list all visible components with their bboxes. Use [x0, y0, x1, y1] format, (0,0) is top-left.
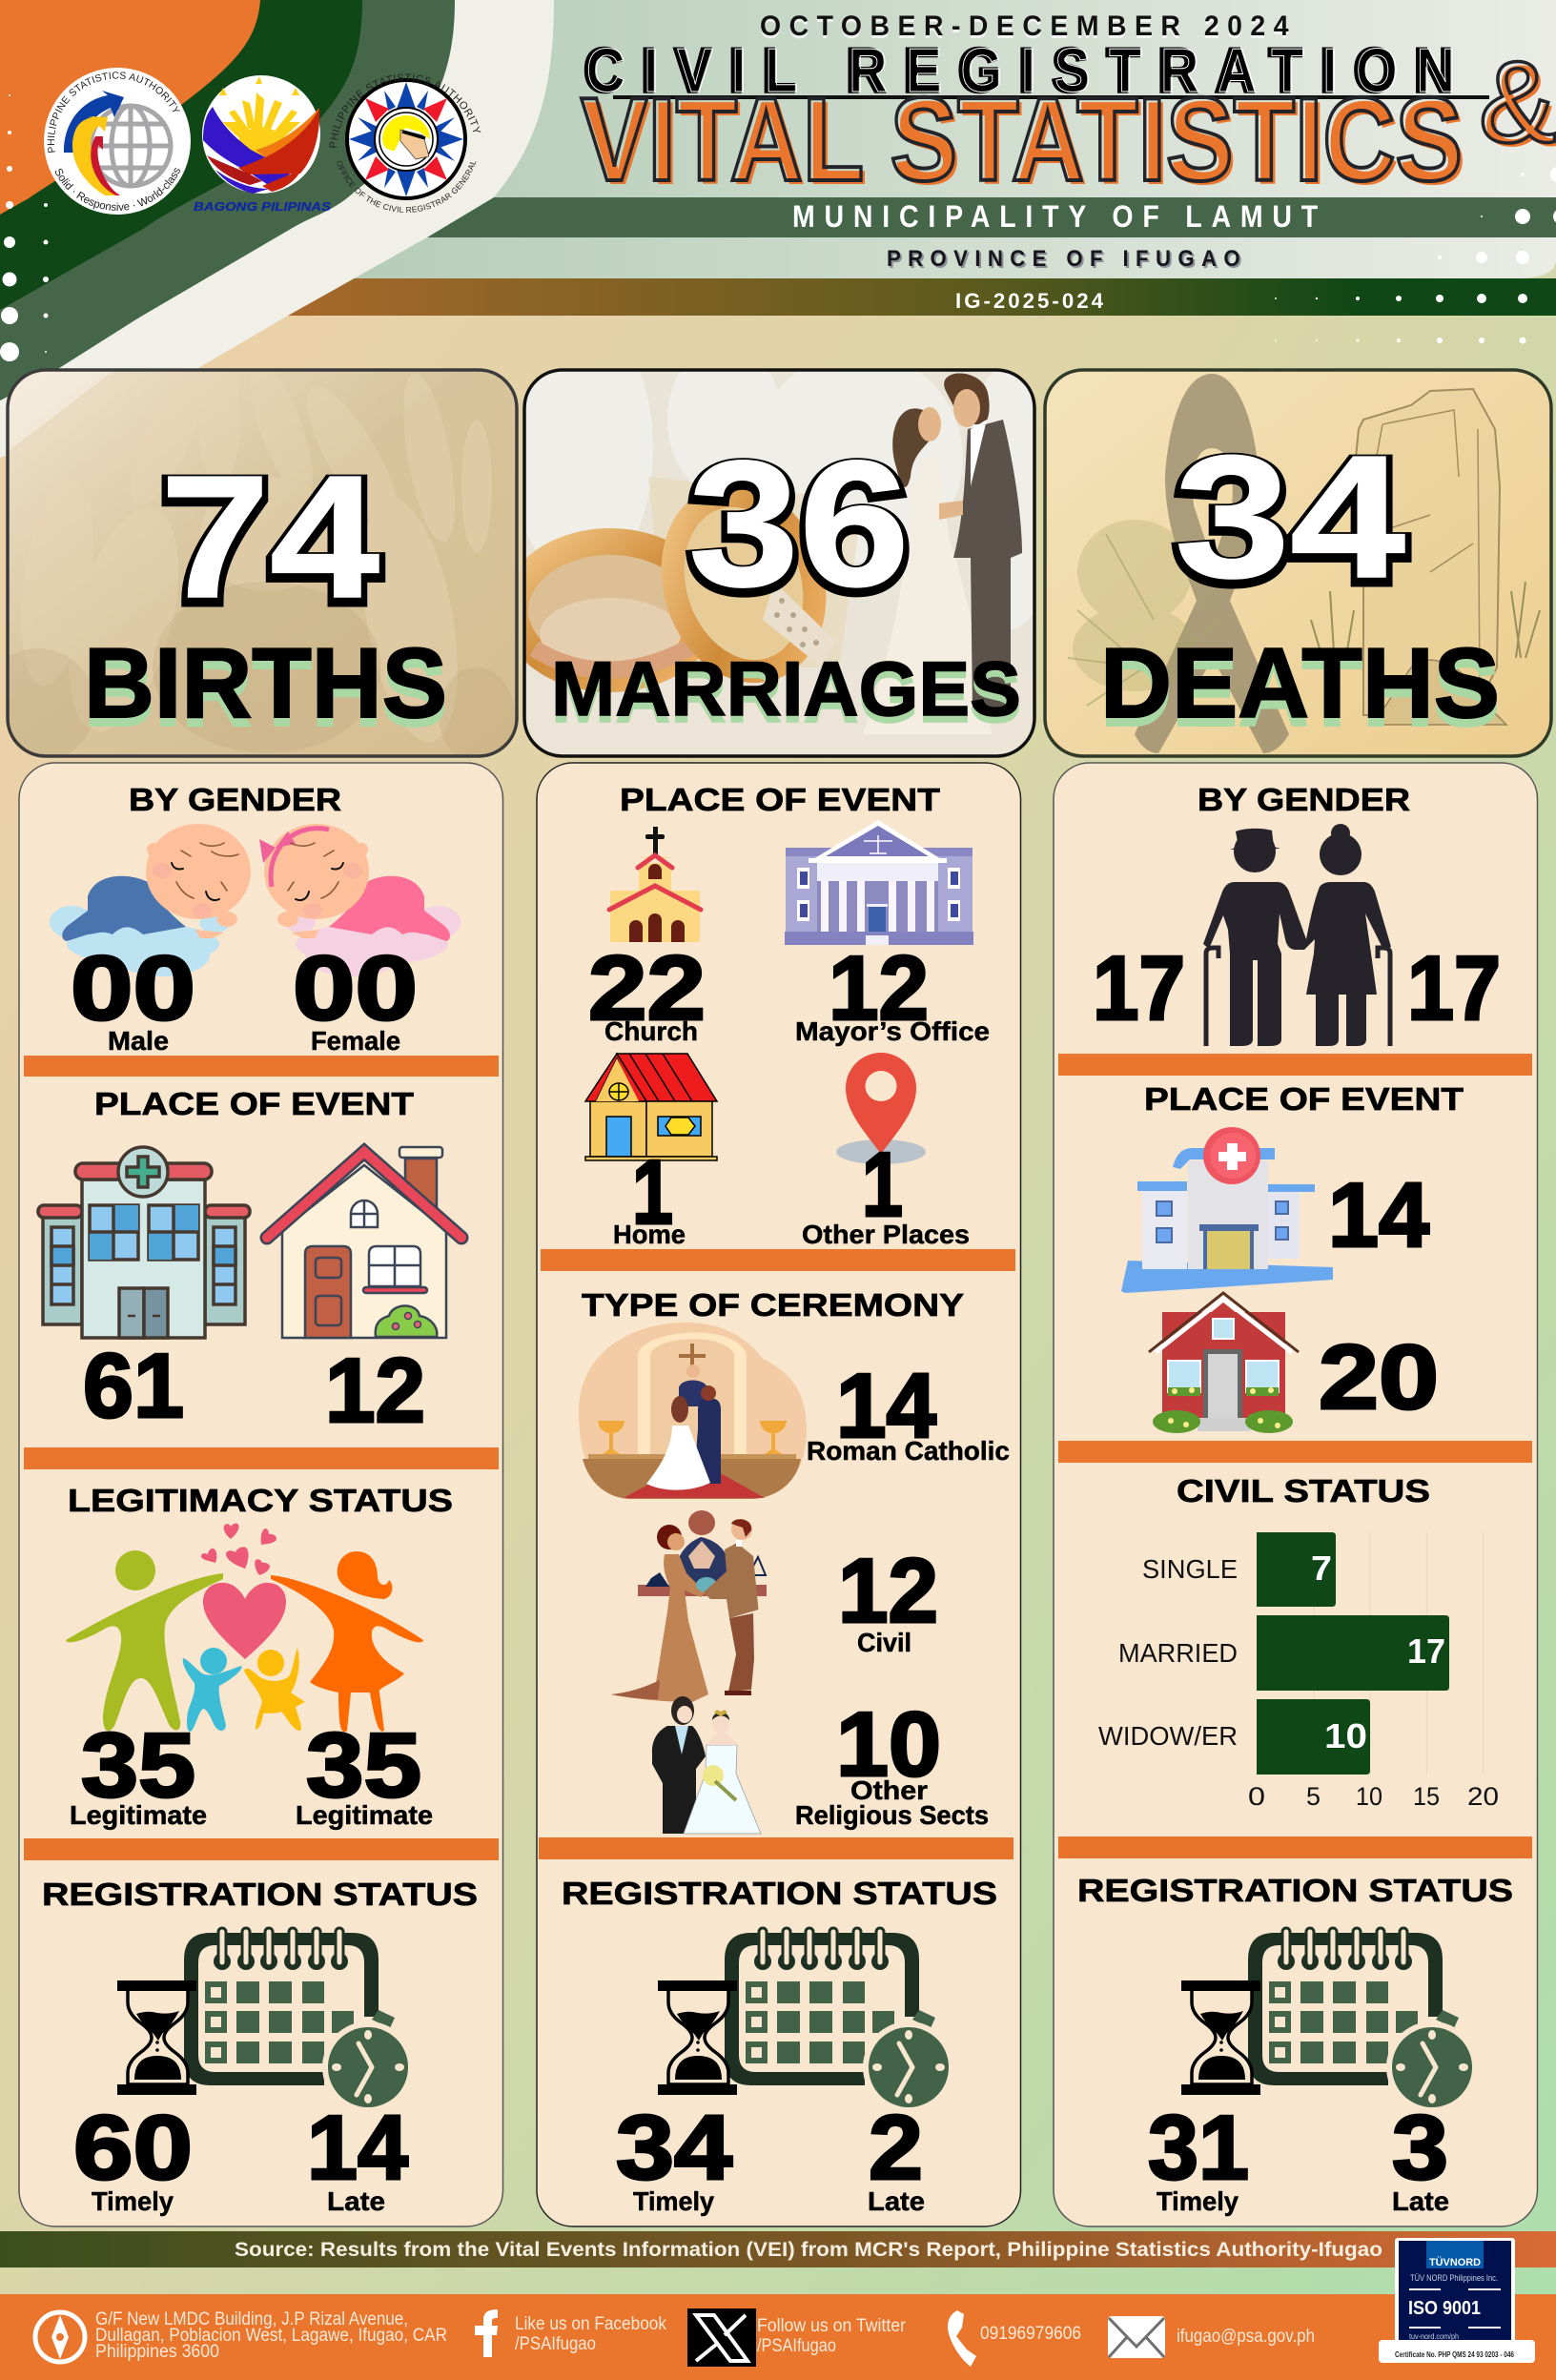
icon: mayor's office [785, 820, 973, 945]
header [0, 0, 1556, 458]
icon: home [585, 1054, 717, 1160]
marriages number: 36 [688, 427, 910, 627]
category: widow/er: WIDOW/ER [1098, 1721, 1238, 1751]
divider bar [24, 1838, 499, 1860]
icon: church [609, 827, 701, 942]
icon: elderly couple [1203, 824, 1391, 1046]
stat: roman catholic: 14 [836, 1355, 936, 1457]
stat: home: 1 [632, 1141, 673, 1243]
births number: 74 [160, 442, 379, 638]
icon: facebook [475, 2309, 498, 2357]
heading: place of event: PLACE OF EVENT [620, 783, 941, 818]
deaths number: 34 [1175, 422, 1405, 618]
header band: municipality [410, 197, 1556, 238]
logo: Philippine Statistics Authority: Solid · Responsive · World-class [55, 168, 180, 211]
divider bar [24, 1447, 499, 1469]
divider bar [1058, 1441, 1532, 1463]
divider bar [541, 1249, 1015, 1271]
logo: Office of the Civil Registrar General: OFFICE OF THE CIVIL REGISTRAR GENERAL [338, 160, 477, 213]
value: single: 7 [1311, 1549, 1332, 1588]
hero card: deaths [1045, 370, 1551, 756]
logo: Philippine Statistics Authority [44, 68, 191, 215]
address: Philippines 3600 [95, 2342, 219, 2362]
badge: ISO 9001 [1379, 2238, 1535, 2363]
value: married: 17 [1407, 1631, 1445, 1671]
axis labels: 10 [1356, 1782, 1382, 1811]
icon: baby girl [259, 824, 461, 976]
icon: phone [948, 2310, 976, 2367]
icon: X [687, 2308, 756, 2367]
province: PROVINCE OF IFUGAO [887, 246, 1247, 272]
axis labels: 15 [1413, 1782, 1440, 1811]
icon: compass [35, 2312, 85, 2362]
icon: envelope [1108, 2316, 1165, 2358]
divider bar [24, 1056, 499, 1077]
stat: other places: 1 [862, 1134, 903, 1236]
category: married: MARRIED [1118, 1638, 1238, 1668]
hero card: births [0, 353, 517, 763]
stat: male count: 00 [71, 937, 195, 1039]
facebook text: /PSAIfugao [515, 2334, 596, 2354]
bar: married [1257, 1615, 1449, 1691]
label: legitimate: Legitimate [70, 1800, 207, 1830]
icon: house [267, 1147, 461, 1338]
stat: timely: 60 [73, 2097, 193, 2199]
title rule [613, 95, 1489, 99]
source text: Source: Results from the Vital Events Information (VEI) from MCR's Report, Philippine Statistics Authority-Ifugao [235, 2239, 1382, 2261]
province: PROVINCE OF IFUGAO [889, 248, 1249, 274]
heading: registration status: REGISTRATION STATUS [42, 1877, 478, 1913]
reference number: IG-2025-024 [955, 289, 1106, 313]
marriages label: MARRIAGES [551, 653, 1021, 739]
icon: baby boy [50, 824, 251, 976]
stat: late: 2 [869, 2097, 923, 2199]
decorative dots right [1275, 167, 1556, 343]
stat: mayor's office: 12 [829, 937, 929, 1039]
stat: female count: 00 [293, 937, 418, 1039]
axis labels: 20 [1467, 1782, 1499, 1811]
badge: ISO 9001: Certificate No. PHP QMS 24 93 0203 - 046 [1395, 2350, 1514, 2359]
icon: 3D hospital [1121, 1127, 1333, 1293]
phone number: 09196979606 [980, 2324, 1081, 2344]
source band [0, 2231, 1556, 2267]
heading: type of ceremony: TYPE OF CEREMONY [582, 1288, 964, 1323]
label: other places: Other Places [802, 1220, 970, 1249]
marriages number: 36 [688, 423, 910, 624]
twitter text: /PSAIfugao [757, 2336, 836, 2356]
divider bar [539, 1837, 1013, 1859]
header title background [381, 0, 1556, 200]
stat: home births: 12 [325, 1340, 425, 1442]
label: late: Late [1392, 2186, 1449, 2216]
title block [581, 10, 1556, 313]
icon: map pin [836, 1053, 926, 1164]
footer [0, 2238, 1556, 2380]
stat: hospital births: 61 [83, 1335, 184, 1437]
stat: male deaths: 17 [1093, 937, 1185, 1039]
label: male: Male [108, 1026, 169, 1056]
divider bar [1058, 1054, 1532, 1076]
value: widow/er: 10 [1324, 1716, 1367, 1755]
marriages wedding photo [526, 372, 1034, 755]
badge: ISO 9001: TÜVNORD [1429, 2256, 1481, 2268]
label: timely: Timely [633, 2186, 714, 2216]
heading: legitimacy status: LEGITIMACY STATUS [68, 1484, 453, 1519]
logo: Office of the Civil Registrar General [329, 73, 481, 213]
logo: Philippine Statistics Authority: PHILIPPINE STATISTICS AUTHORITY [48, 72, 180, 153]
hero card: marriages [522, 368, 1036, 758]
icon: red brick house [1149, 1293, 1299, 1433]
label: other: Other [850, 1775, 928, 1805]
label: religious sects: Religious Sects [795, 1800, 989, 1830]
heading: registration status: REGISTRATION STATUS [1077, 1874, 1513, 1909]
logo: Bagong Pilipinas: BAGONG PILIPINAS [194, 199, 331, 214]
bride and groom [863, 373, 1022, 734]
header decorative cream swoosh [0, 0, 554, 458]
births label: BIRTHS [84, 637, 447, 748]
date line: OCTOBER-DECEMBER 2024 [760, 13, 1297, 45]
email: ifugao@psa.gov.ph [1177, 2327, 1315, 2347]
badge: ISO 9001: ISO 9001 [1408, 2298, 1481, 2319]
stat: legitimate count: 35 [81, 1714, 195, 1816]
icon: family with hearts [66, 1524, 423, 1732]
axis labels: 5 [1306, 1782, 1321, 1811]
stat: female deaths: 17 [1407, 937, 1501, 1039]
deaths ribbon and gravestone photo [1045, 370, 1551, 756]
category: single: SINGLE [1142, 1554, 1238, 1584]
label: mayor's office: Mayor’s Office [795, 1016, 990, 1046]
label: civil: Civil [857, 1628, 911, 1657]
bar: widow/er [1257, 1699, 1370, 1775]
births label: BIRTHS [84, 628, 447, 739]
header decorative orange swoosh [0, 0, 260, 215]
icon: calendar, hourglass and clock [658, 1928, 954, 2113]
municipality: MUNICIPALITY OF LAMUT [792, 199, 1327, 234]
births number: 74 [160, 439, 379, 634]
icon: civil wedding [611, 1510, 767, 1702]
stat: other religious sects: 10 [836, 1693, 941, 1795]
address [95, 2309, 447, 2362]
icon: calendar, hourglass and clock [1181, 1928, 1478, 2113]
twitter text [757, 2316, 907, 2356]
divider bar [1058, 1836, 1532, 1858]
axis labels [1248, 1782, 1499, 1811]
facebook text [515, 2314, 666, 2354]
heading: registration status: REGISTRATION STATUS [562, 1877, 997, 1912]
marriages label: MARRIAGES [551, 646, 1021, 732]
date line: OCTOBER-DECEMBER 2024 [760, 10, 1297, 42]
label: late: Late [868, 2186, 925, 2216]
deaths label: DEATHS [1100, 628, 1500, 739]
stat: late: 3 [1392, 2097, 1448, 2199]
heading: by gender: BY GENDER [129, 783, 341, 818]
births hands photo [0, 353, 517, 763]
header decorative mid green swoosh [0, 0, 455, 400]
address: G/F New LMDC Building, J.P Rizal Avenue, [95, 2309, 408, 2329]
title: ampersand: & [1479, 37, 1556, 167]
header decorative dark green swoosh [0, 0, 362, 310]
label: timely: Timely [1157, 2186, 1239, 2216]
bar: single [1257, 1532, 1336, 1607]
icon: church wedding [579, 1323, 807, 1499]
label: roman catholic: Roman Catholic [807, 1436, 1010, 1466]
panel: births [19, 763, 503, 2226]
label: female: Female [311, 1026, 400, 1056]
label: late: Late [327, 2186, 385, 2216]
heading: by gender: BY GENDER [1198, 783, 1410, 818]
panel: deaths [1054, 763, 1537, 2226]
stat: timely: 34 [616, 2097, 732, 2199]
bar chart: civil status [1098, 1532, 1499, 1811]
header band: reference number [276, 278, 1556, 316]
decorative dots left [0, 94, 49, 361]
label: church: Church [604, 1016, 698, 1046]
label: legitimate second: Legitimate [296, 1800, 433, 1830]
facebook text: Like us on Facebook [515, 2314, 666, 2334]
deaths number: 34 [1175, 419, 1405, 614]
logo: Bagong Pilipinas [194, 75, 331, 214]
stat: home: 20 [1319, 1326, 1439, 1428]
deaths label: DEATHS [1100, 637, 1500, 748]
badge: ISO 9001: tuv-nord.com/ph [1409, 2332, 1459, 2341]
heading: civil status: CIVIL STATUS [1177, 1474, 1430, 1509]
icon: calendar, hourglass and clock [117, 1928, 414, 2113]
panel: marriages [537, 763, 1020, 2226]
logo: Office of the Civil Registrar General: PHILIPPINE STATISTICS AUTHORITY [329, 73, 481, 148]
heading: place of event: PLACE OF EVENT [94, 1087, 415, 1122]
badge: ISO 9001: TÜV NORD Philippines Inc. [1410, 2273, 1498, 2283]
twitter text: Follow us on Twitter [757, 2316, 907, 2336]
label: home: Home [613, 1220, 686, 1249]
header band: province [343, 237, 1556, 278]
stat: legitimate count second: 35 [306, 1714, 421, 1816]
label: timely: Timely [92, 2186, 174, 2216]
stat: church: 22 [588, 937, 706, 1039]
stat: hospital: 14 [1328, 1164, 1429, 1266]
stat: civil: 12 [838, 1540, 938, 1642]
address: Dullagan, Poblacion West, Lagawe, Ifugao, CAR [95, 2326, 447, 2346]
icon: religious sect wedding [652, 1696, 761, 1834]
axis labels: 0 [1248, 1782, 1265, 1811]
heading: place of event: PLACE OF EVENT [1144, 1082, 1464, 1118]
stat: late: 14 [307, 2097, 408, 2199]
icon: hospital [38, 1147, 250, 1338]
stat: timely: 31 [1148, 2097, 1249, 2199]
